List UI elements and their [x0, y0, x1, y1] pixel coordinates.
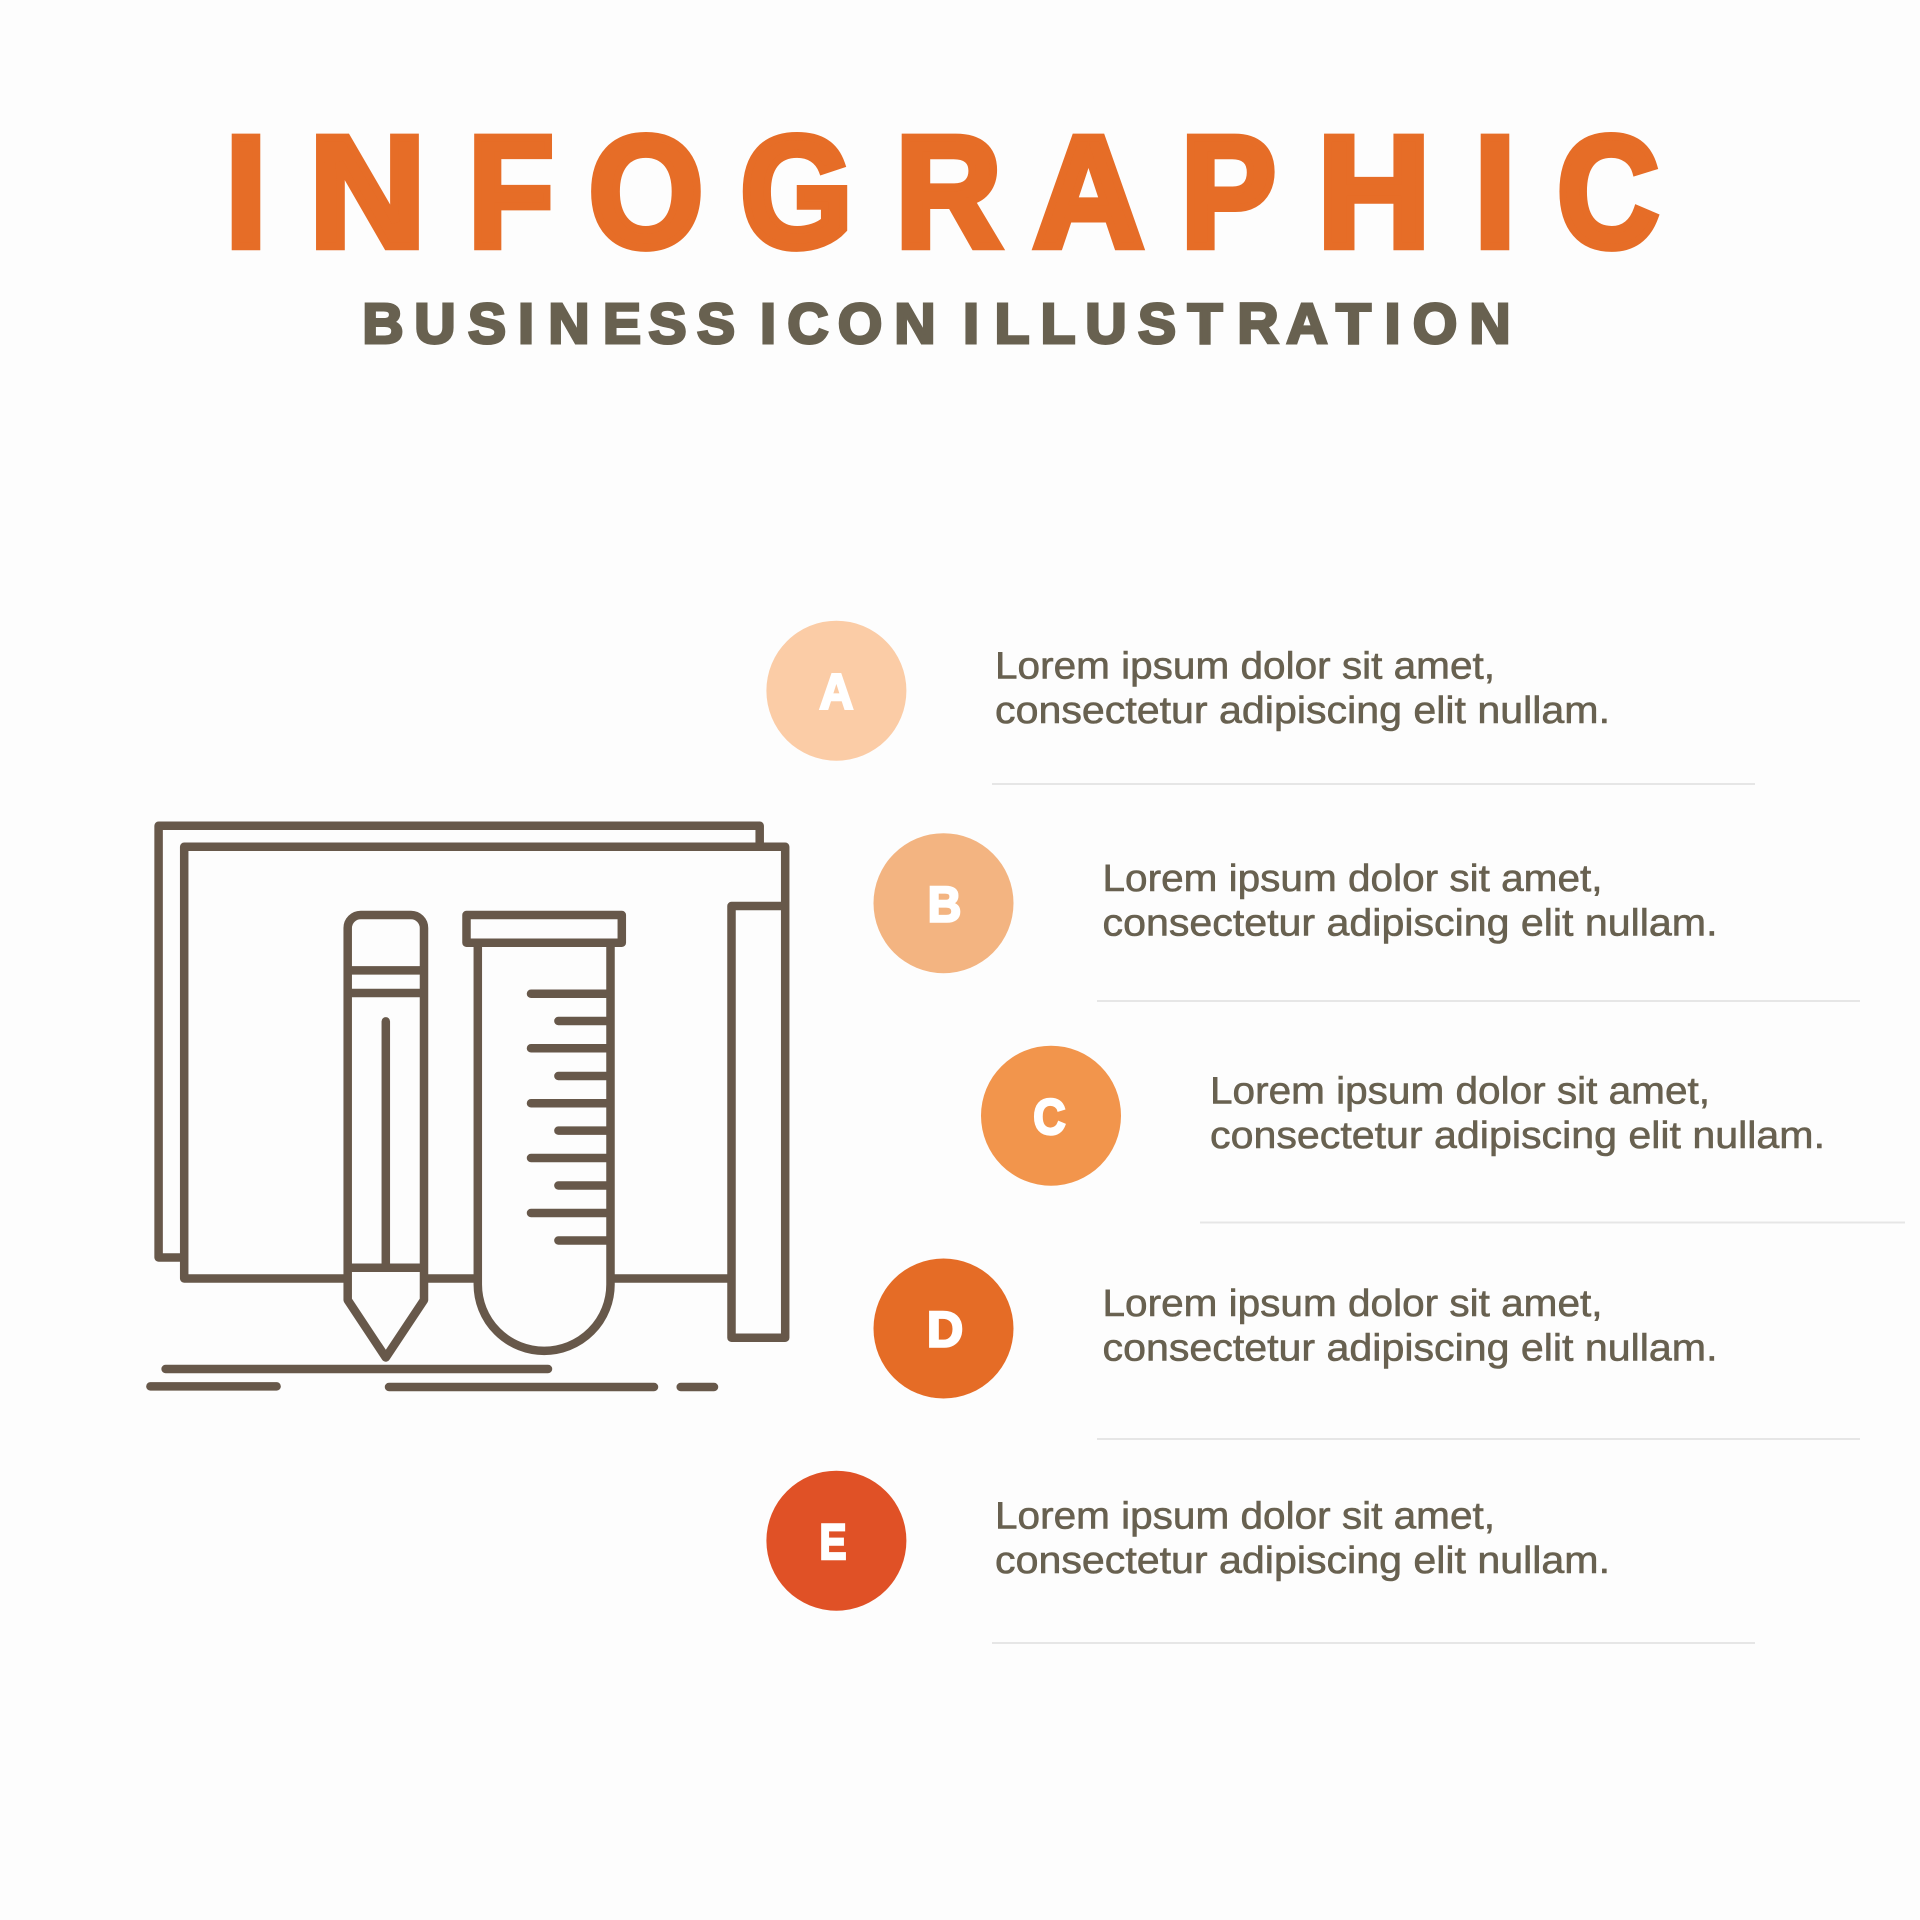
text B: Lorem ipsum dolor sit amet,	[1102, 858, 1602, 900]
row E	[766, 1471, 1755, 1644]
title: H	[1318, 104, 1430, 280]
pencil	[348, 915, 424, 1358]
title: R	[896, 104, 1001, 280]
text A: Lorem ipsum dolor sit amet,	[995, 646, 1495, 688]
text C: Lorem ipsum dolor sit amet,	[1210, 1070, 1710, 1112]
subtitle: BUSINESS ICON ILLUSTRATION	[362, 292, 1511, 356]
divider D	[1097, 1438, 1860, 1440]
badge B	[874, 833, 1014, 973]
badge D: D	[927, 1302, 963, 1358]
badge A	[766, 621, 906, 761]
title: I	[226, 104, 266, 280]
text C	[1210, 1070, 1825, 1157]
text E: Lorem ipsum dolor sit amet,	[995, 1496, 1495, 1538]
text C: consectetur adipiscing elit nullam.	[1210, 1115, 1825, 1157]
text A	[995, 646, 1610, 732]
title: A	[1033, 104, 1144, 280]
text E: consectetur adipiscing elit nullam.	[995, 1540, 1610, 1582]
badge D	[874, 1258, 1014, 1398]
badge E: E	[820, 1514, 846, 1570]
badge C: C	[1033, 1089, 1066, 1145]
badge C	[981, 1046, 1121, 1186]
divider B	[1097, 1000, 1860, 1002]
text D	[1102, 1283, 1718, 1370]
text B: consectetur adipiscing elit nullam.	[1102, 902, 1718, 944]
badge B: B	[928, 876, 961, 932]
text E	[995, 1496, 1610, 1582]
badge E	[766, 1471, 906, 1611]
divider E	[992, 1642, 1755, 1644]
divider C	[1200, 1222, 1905, 1224]
text B	[1102, 858, 1718, 944]
ruler	[732, 906, 785, 1338]
text A: consectetur adipiscing elit nullam.	[995, 690, 1610, 732]
back sheet	[159, 826, 760, 1258]
title: O	[589, 104, 703, 280]
row B	[874, 833, 1860, 1002]
row C	[981, 1046, 1905, 1224]
title: F	[468, 104, 554, 280]
title: C	[1557, 104, 1659, 280]
title: G	[740, 104, 852, 280]
row D	[874, 1258, 1860, 1440]
title: P	[1181, 104, 1276, 280]
title: I	[1475, 104, 1515, 280]
ground lines	[150, 1369, 714, 1387]
front sheet	[184, 847, 785, 1278]
icon: pencil and test tube on blueprint	[150, 826, 785, 1387]
divider A	[992, 783, 1755, 785]
row A	[766, 621, 1755, 785]
title: N	[309, 104, 426, 280]
text D: Lorem ipsum dolor sit amet,	[1102, 1283, 1602, 1325]
badge A: A	[819, 664, 853, 720]
text D: consectetur adipiscing elit nullam.	[1102, 1328, 1718, 1370]
test tube	[466, 915, 622, 1351]
